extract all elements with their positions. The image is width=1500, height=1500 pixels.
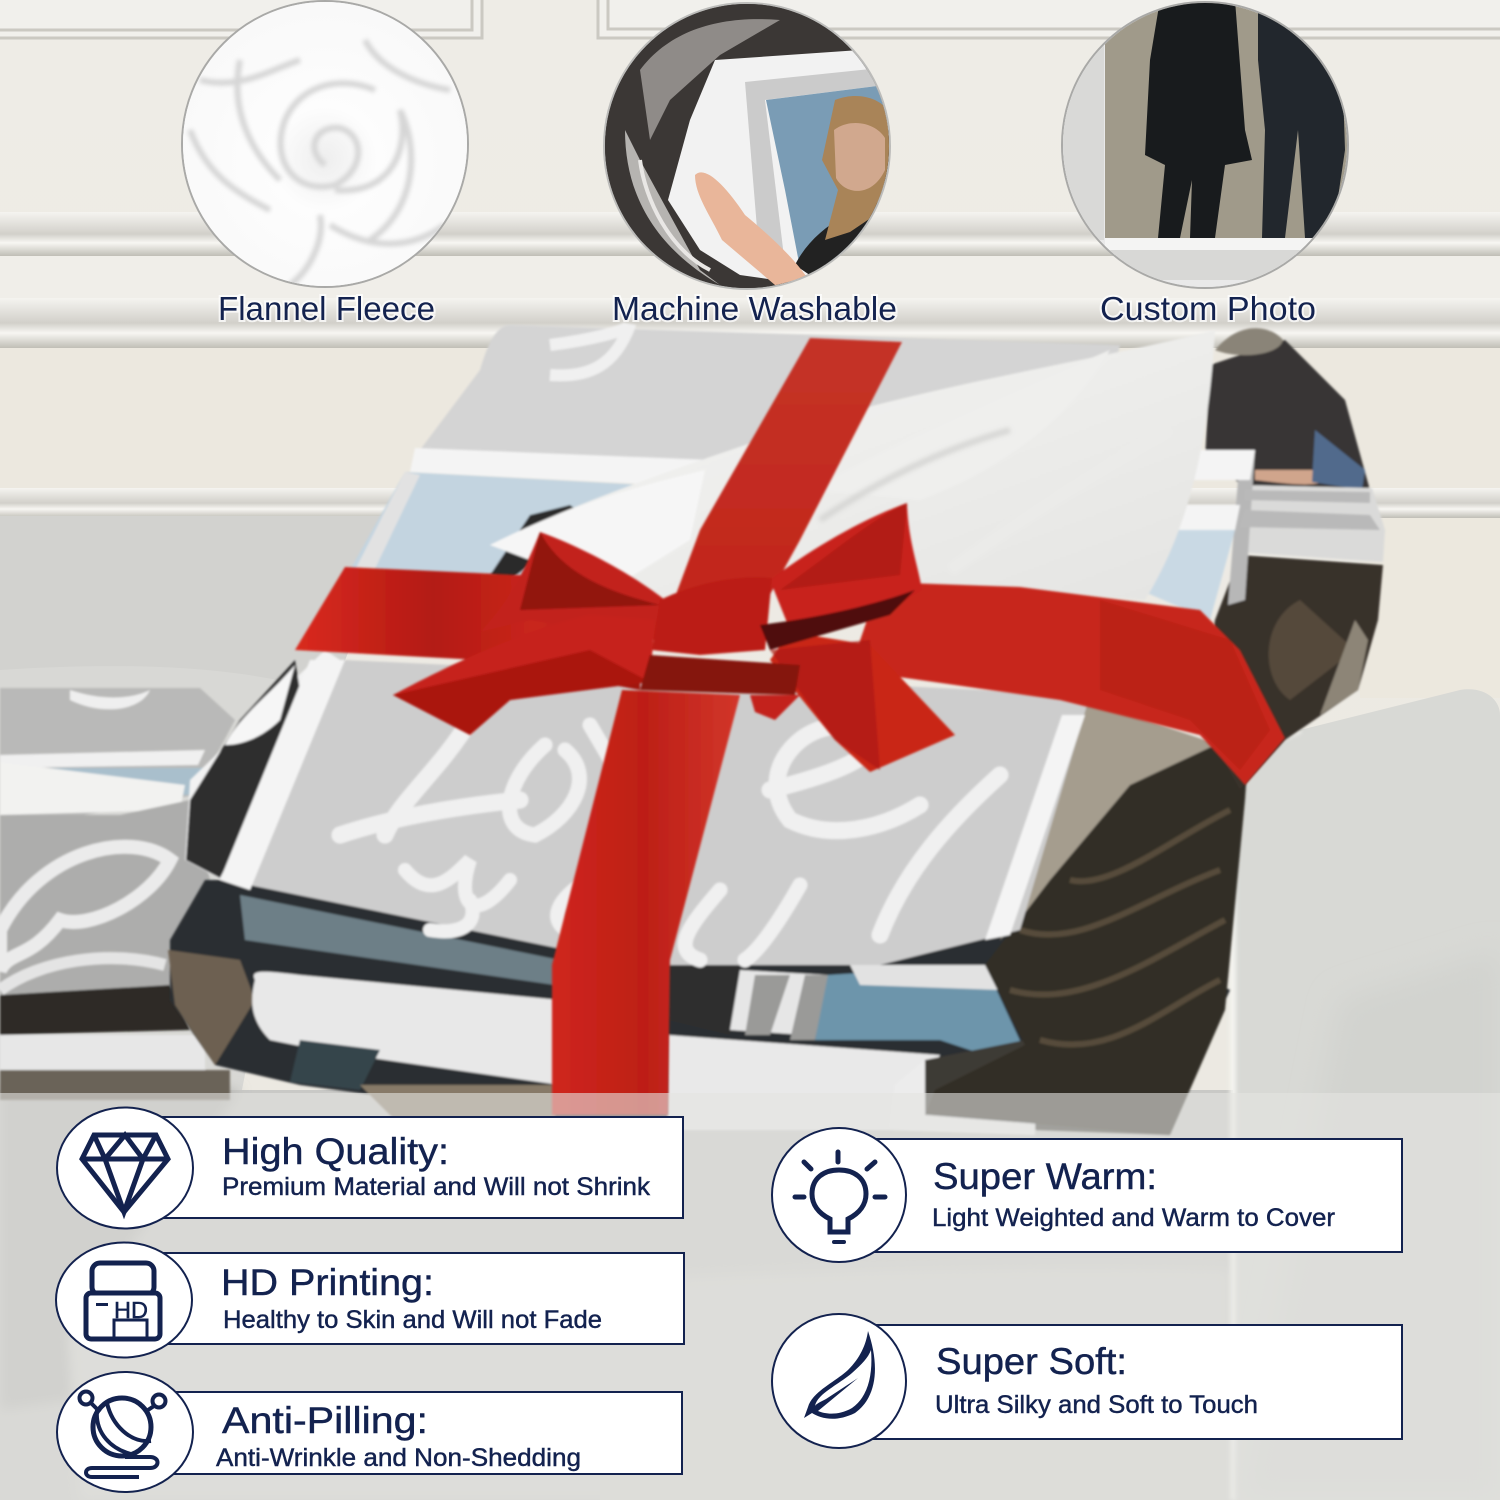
feature: Super Warm [772, 1128, 1402, 1262]
feature: Super Soft: Ultra Silky and Soft to Touch [935, 1391, 1258, 1419]
icon: leaf [804, 1331, 875, 1419]
translucent bottom band [0, 1093, 1500, 1500]
feature: High Quality: Premium Material and Will not Shrink [222, 1173, 651, 1201]
woman in photo [796, 202, 878, 274]
bow knot [652, 577, 772, 655]
top face of blanket [420, 325, 1120, 470]
feature: HD Printing [56, 1242, 684, 1358]
feature: Anti-Pilling: Anti-Pilling: [222, 1400, 428, 1441]
ribbon vertical lower [552, 690, 740, 1115]
ribbon vertical upper [672, 338, 902, 640]
red ribbon and bow [295, 338, 1285, 1115]
bow right loop [770, 503, 922, 630]
photo circle: Machine Washable [600, 0, 895, 295]
icon: printer HD [86, 1263, 160, 1339]
feature: High Quality: High Quality: [222, 1131, 449, 1172]
circle caption: Flannel Fleece: Flannel Fleece [218, 290, 435, 327]
circle caption: Machine Washable: Machine Washable [612, 290, 897, 327]
feature: HD Printing: Healthy to Skin and Will not Fade [223, 1306, 602, 1334]
feature: Super Soft [772, 1314, 1402, 1448]
dark textured photo area right [925, 730, 1250, 1135]
cloth [668, 50, 890, 285]
ribbon horizontal left [295, 567, 640, 690]
photo circle: Custom Photo [1060, 0, 1355, 295]
feature: Anti-Pilling [57, 1372, 682, 1492]
feature: Anti-Pilling: Anti-Wrinkle and Non-Shedding [216, 1444, 581, 1472]
feature: Super Soft: Super Soft: [936, 1341, 1127, 1382]
bow left loop [480, 532, 665, 640]
icon: light bulb [795, 1152, 885, 1242]
armchair [1233, 689, 1500, 1500]
feature: HD Printing: HD Printing: [221, 1262, 434, 1303]
photo circle: Flannel Fleece [180, 0, 470, 290]
feature: Super Warm: Light Weighted and Warm to Cover [932, 1204, 1335, 1232]
fold of white fleece under ribbon [490, 330, 1215, 600]
circle caption: Custom Photo: Custom Photo [1100, 290, 1316, 327]
right upper part of blanket [1200, 555, 1383, 790]
bow left tail [393, 615, 655, 735]
ribbon horizontal right [850, 582, 1285, 785]
stacked blankets on the left [0, 688, 235, 1100]
wall panel mouldings top [0, 0, 1500, 38]
icon: printer HD: HD [114, 1297, 148, 1323]
silhouettes [1145, 0, 1252, 238]
sofa seat [0, 1090, 1500, 1500]
beige sand photo area right [1000, 700, 1220, 940]
sofa back [0, 516, 400, 700]
icon: diamond [82, 1135, 168, 1212]
handwriting on front [340, 720, 1000, 960]
wall rail mouldings [0, 212, 1500, 698]
hand [695, 172, 812, 285]
feature: High Quality [57, 1108, 683, 1228]
front face lower panel [185, 650, 340, 880]
bow right tail [770, 632, 955, 772]
icon: pilling ball [80, 1392, 166, 1477]
blanket lower layers [170, 880, 1230, 1120]
ribbon piece under knot [750, 695, 800, 720]
feature: Super Warm: Super Warm: [933, 1156, 1157, 1197]
main folded photo blanket [168, 325, 1385, 1135]
